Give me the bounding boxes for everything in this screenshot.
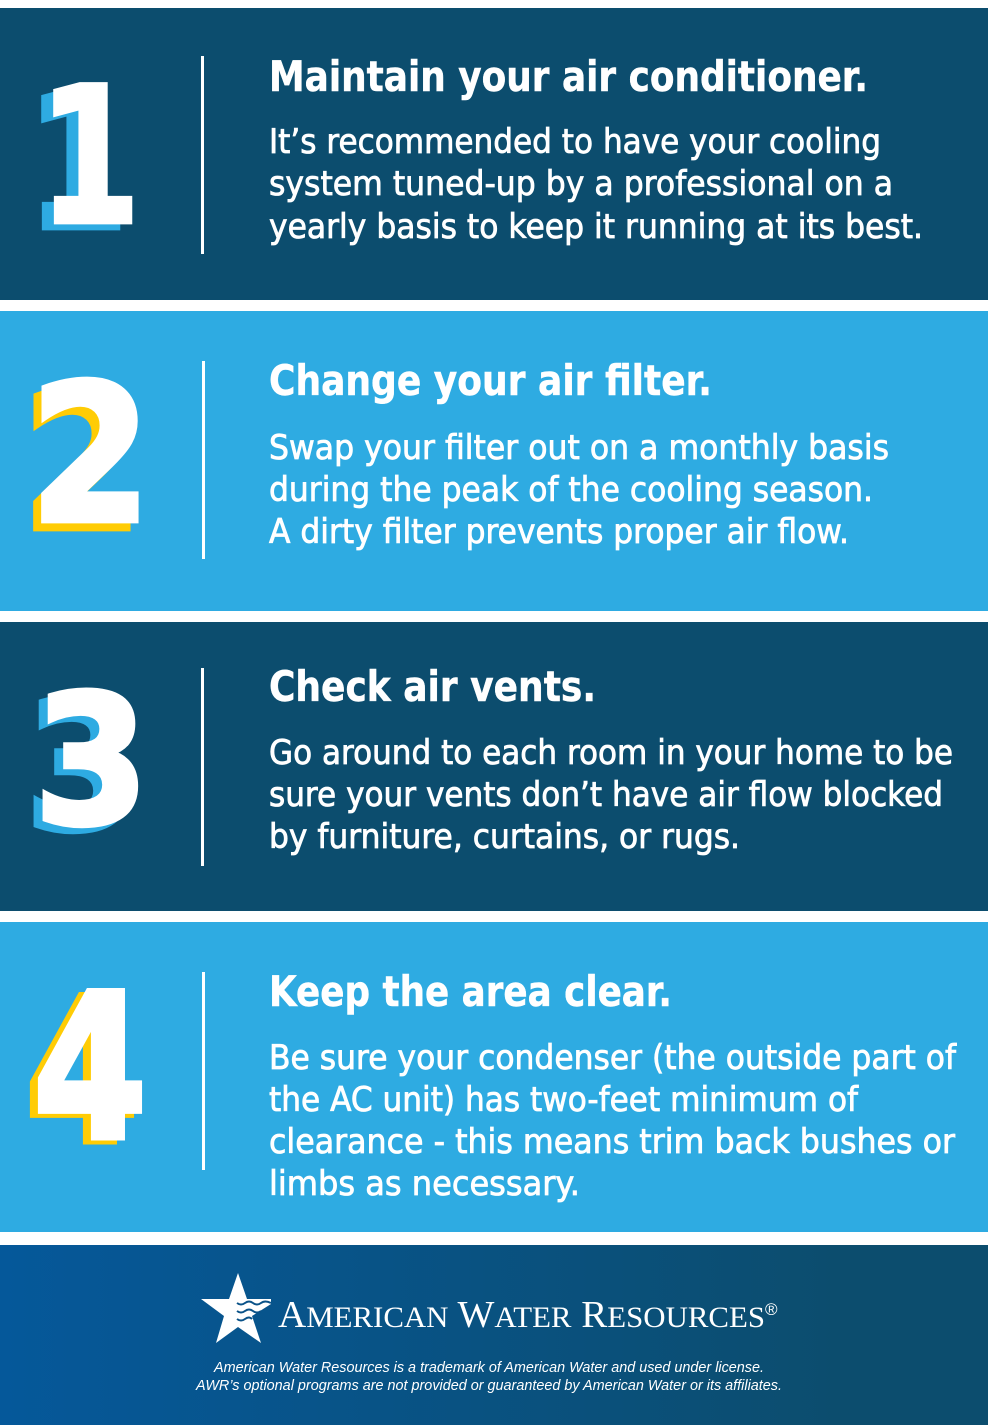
numeral 3: 3 — [25, 663, 140, 872]
body: step 1: yearly basis to keep it running at its best. — [269, 207, 923, 247]
body: step 3: by furniture, curtains, or rugs. — [269, 817, 740, 857]
body: step 4: limbs as necessary. — [269, 1164, 580, 1204]
icon: star with waves — [201, 1273, 271, 1343]
numeral 2: 2 — [30, 344, 151, 565]
logo wordmark: AMERICAN WATER RESOURCES — [278, 1294, 765, 1336]
panel: footer — [0, 1245, 988, 1425]
body: step 1 — [269, 122, 923, 247]
disclaimer — [195, 1360, 782, 1394]
panel: step 2 — [0, 311, 988, 611]
registered mark: ® — [765, 1300, 778, 1319]
body: step 3 — [269, 733, 953, 857]
body: step 1: It’s recommended to have your cooling — [269, 122, 881, 162]
panel: step 3 — [0, 622, 988, 911]
numeral 2: 2 — [22, 352, 143, 573]
body: step 4: clearance - this means trim back bushes or — [269, 1122, 955, 1162]
body: step 2 — [269, 428, 889, 552]
numeral 3: 3 — [34, 657, 149, 866]
body: step 2: A dirty filter prevents proper air flow. — [269, 512, 849, 552]
body: step 1: system tuned-up by a professional on a — [269, 164, 893, 204]
body: step 2: during the peak of the cooling season. — [269, 470, 873, 510]
numeral 4: 4 — [25, 956, 139, 1190]
body: step 2: Swap your filter out on a monthly basis — [269, 428, 889, 468]
heading: step 4: Keep the area clear. — [269, 967, 672, 1016]
numeral 4: 4 — [33, 952, 147, 1186]
body: step 4: the AC unit) has two-feet minimum of — [269, 1080, 859, 1120]
body: step 3: sure your vents don’t have air flow blocked — [269, 775, 943, 815]
numeral 1: 1 — [38, 47, 141, 268]
disclaimer: American Water Resources is a trademark of American Water and used under license. — [213, 1360, 764, 1376]
panel: step 1 — [0, 8, 988, 300]
numeral 1: 1 — [26, 53, 129, 274]
body: step 4 — [269, 1038, 957, 1204]
panel: step 4 — [0, 922, 988, 1232]
heading: step 3: Check air vents. — [269, 662, 596, 711]
heading: step 1: Maintain your air conditioner. — [269, 52, 868, 101]
disclaimer: AWR’s optional programs are not provided or guaranteed by American Water or its affiliates. — [195, 1378, 782, 1394]
heading: step 2: Change your air filter. — [269, 356, 712, 405]
